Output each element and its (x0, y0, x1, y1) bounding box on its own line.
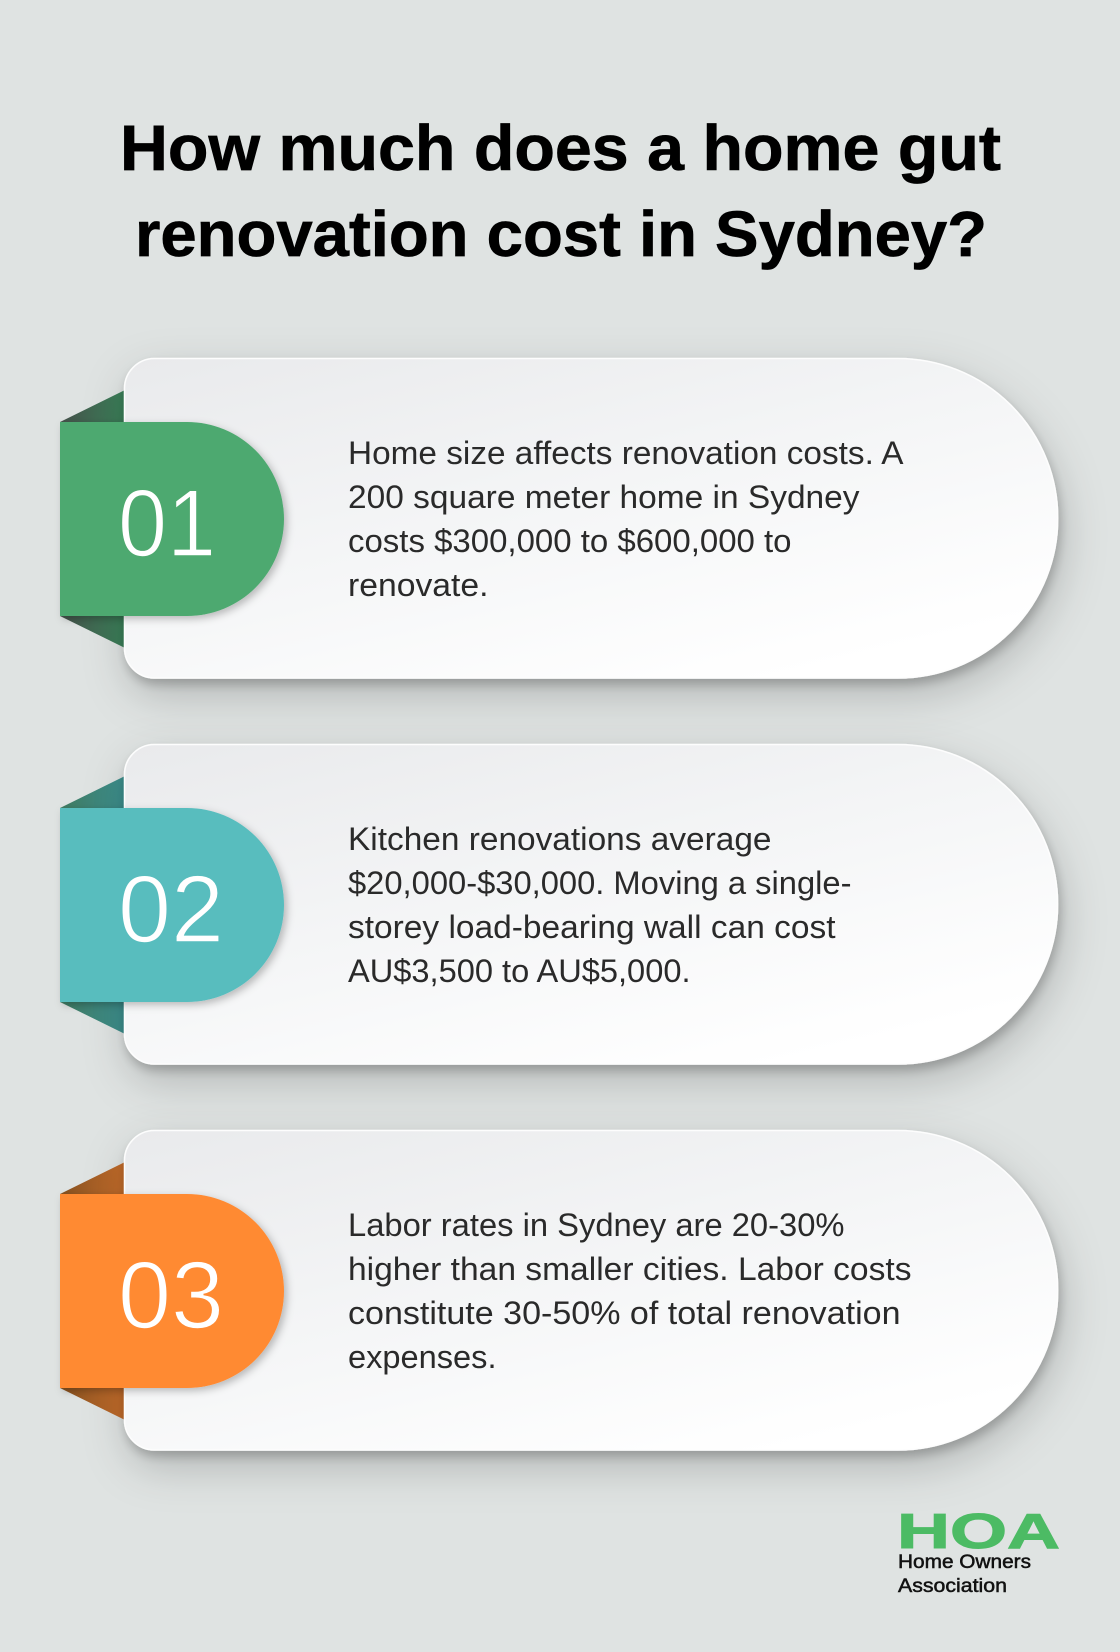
card 02 (124, 744, 1058, 1064)
panel: step 02 kitchen (60, 744, 1058, 1064)
fold: bottom ribbon 03 (60, 1388, 125, 1420)
text 03: expenses. (348, 1339, 496, 1375)
text 01: 200 square meter home in Sydney (348, 479, 860, 515)
number 01: 01 (118, 470, 216, 577)
text 01 (348, 435, 904, 603)
fold: bottom ribbon 02 (60, 1002, 125, 1034)
text 03: higher than smaller cities. Labor costs (348, 1251, 912, 1287)
title: renovation cost in Sydney? (135, 198, 987, 270)
text 03 (348, 1207, 912, 1375)
badge 01 (60, 422, 284, 616)
logo: Home Owners Association: HOA (897, 1505, 1060, 1559)
logo: Home Owners Association: Home Owners (898, 1552, 1031, 1573)
text 02 (348, 821, 852, 989)
fold: top ribbon 03 (60, 1162, 125, 1194)
badge 03 (60, 1194, 284, 1388)
text 03: Labor rates in Sydney are 20-30% (348, 1207, 844, 1243)
panel: step 01 home size (60, 358, 1058, 678)
fold: top ribbon 01 (60, 390, 125, 422)
card 03 (124, 1130, 1058, 1450)
title (120, 112, 1001, 270)
text 02: $20,000-$30,000. Moving a single- (348, 865, 852, 901)
badge 02 (60, 808, 284, 1002)
text 02: Kitchen renovations average (348, 821, 772, 857)
text 03: constitute 30-50% of total renovation (348, 1295, 900, 1331)
text 01: Home size affects renovation costs. A (348, 435, 904, 471)
panel: step 03 labor (60, 1130, 1058, 1450)
text 02: storey load-bearing wall can cost (348, 909, 836, 945)
logo: Home Owners Association: Association (898, 1576, 1007, 1597)
fold: top ribbon 02 (60, 776, 125, 808)
text 02: AU$3,500 to AU$5,000. (348, 953, 690, 989)
logo: Home Owners Association (897, 1505, 1060, 1597)
title: How much does a home gut (120, 112, 1001, 184)
text 01: costs $300,000 to $600,000 to (348, 523, 792, 559)
number 02: 02 (118, 856, 224, 963)
fold: bottom ribbon 01 (60, 616, 125, 648)
number 03: 03 (118, 1242, 224, 1349)
text 01: renovate. (348, 567, 488, 603)
card 01 (124, 358, 1058, 678)
